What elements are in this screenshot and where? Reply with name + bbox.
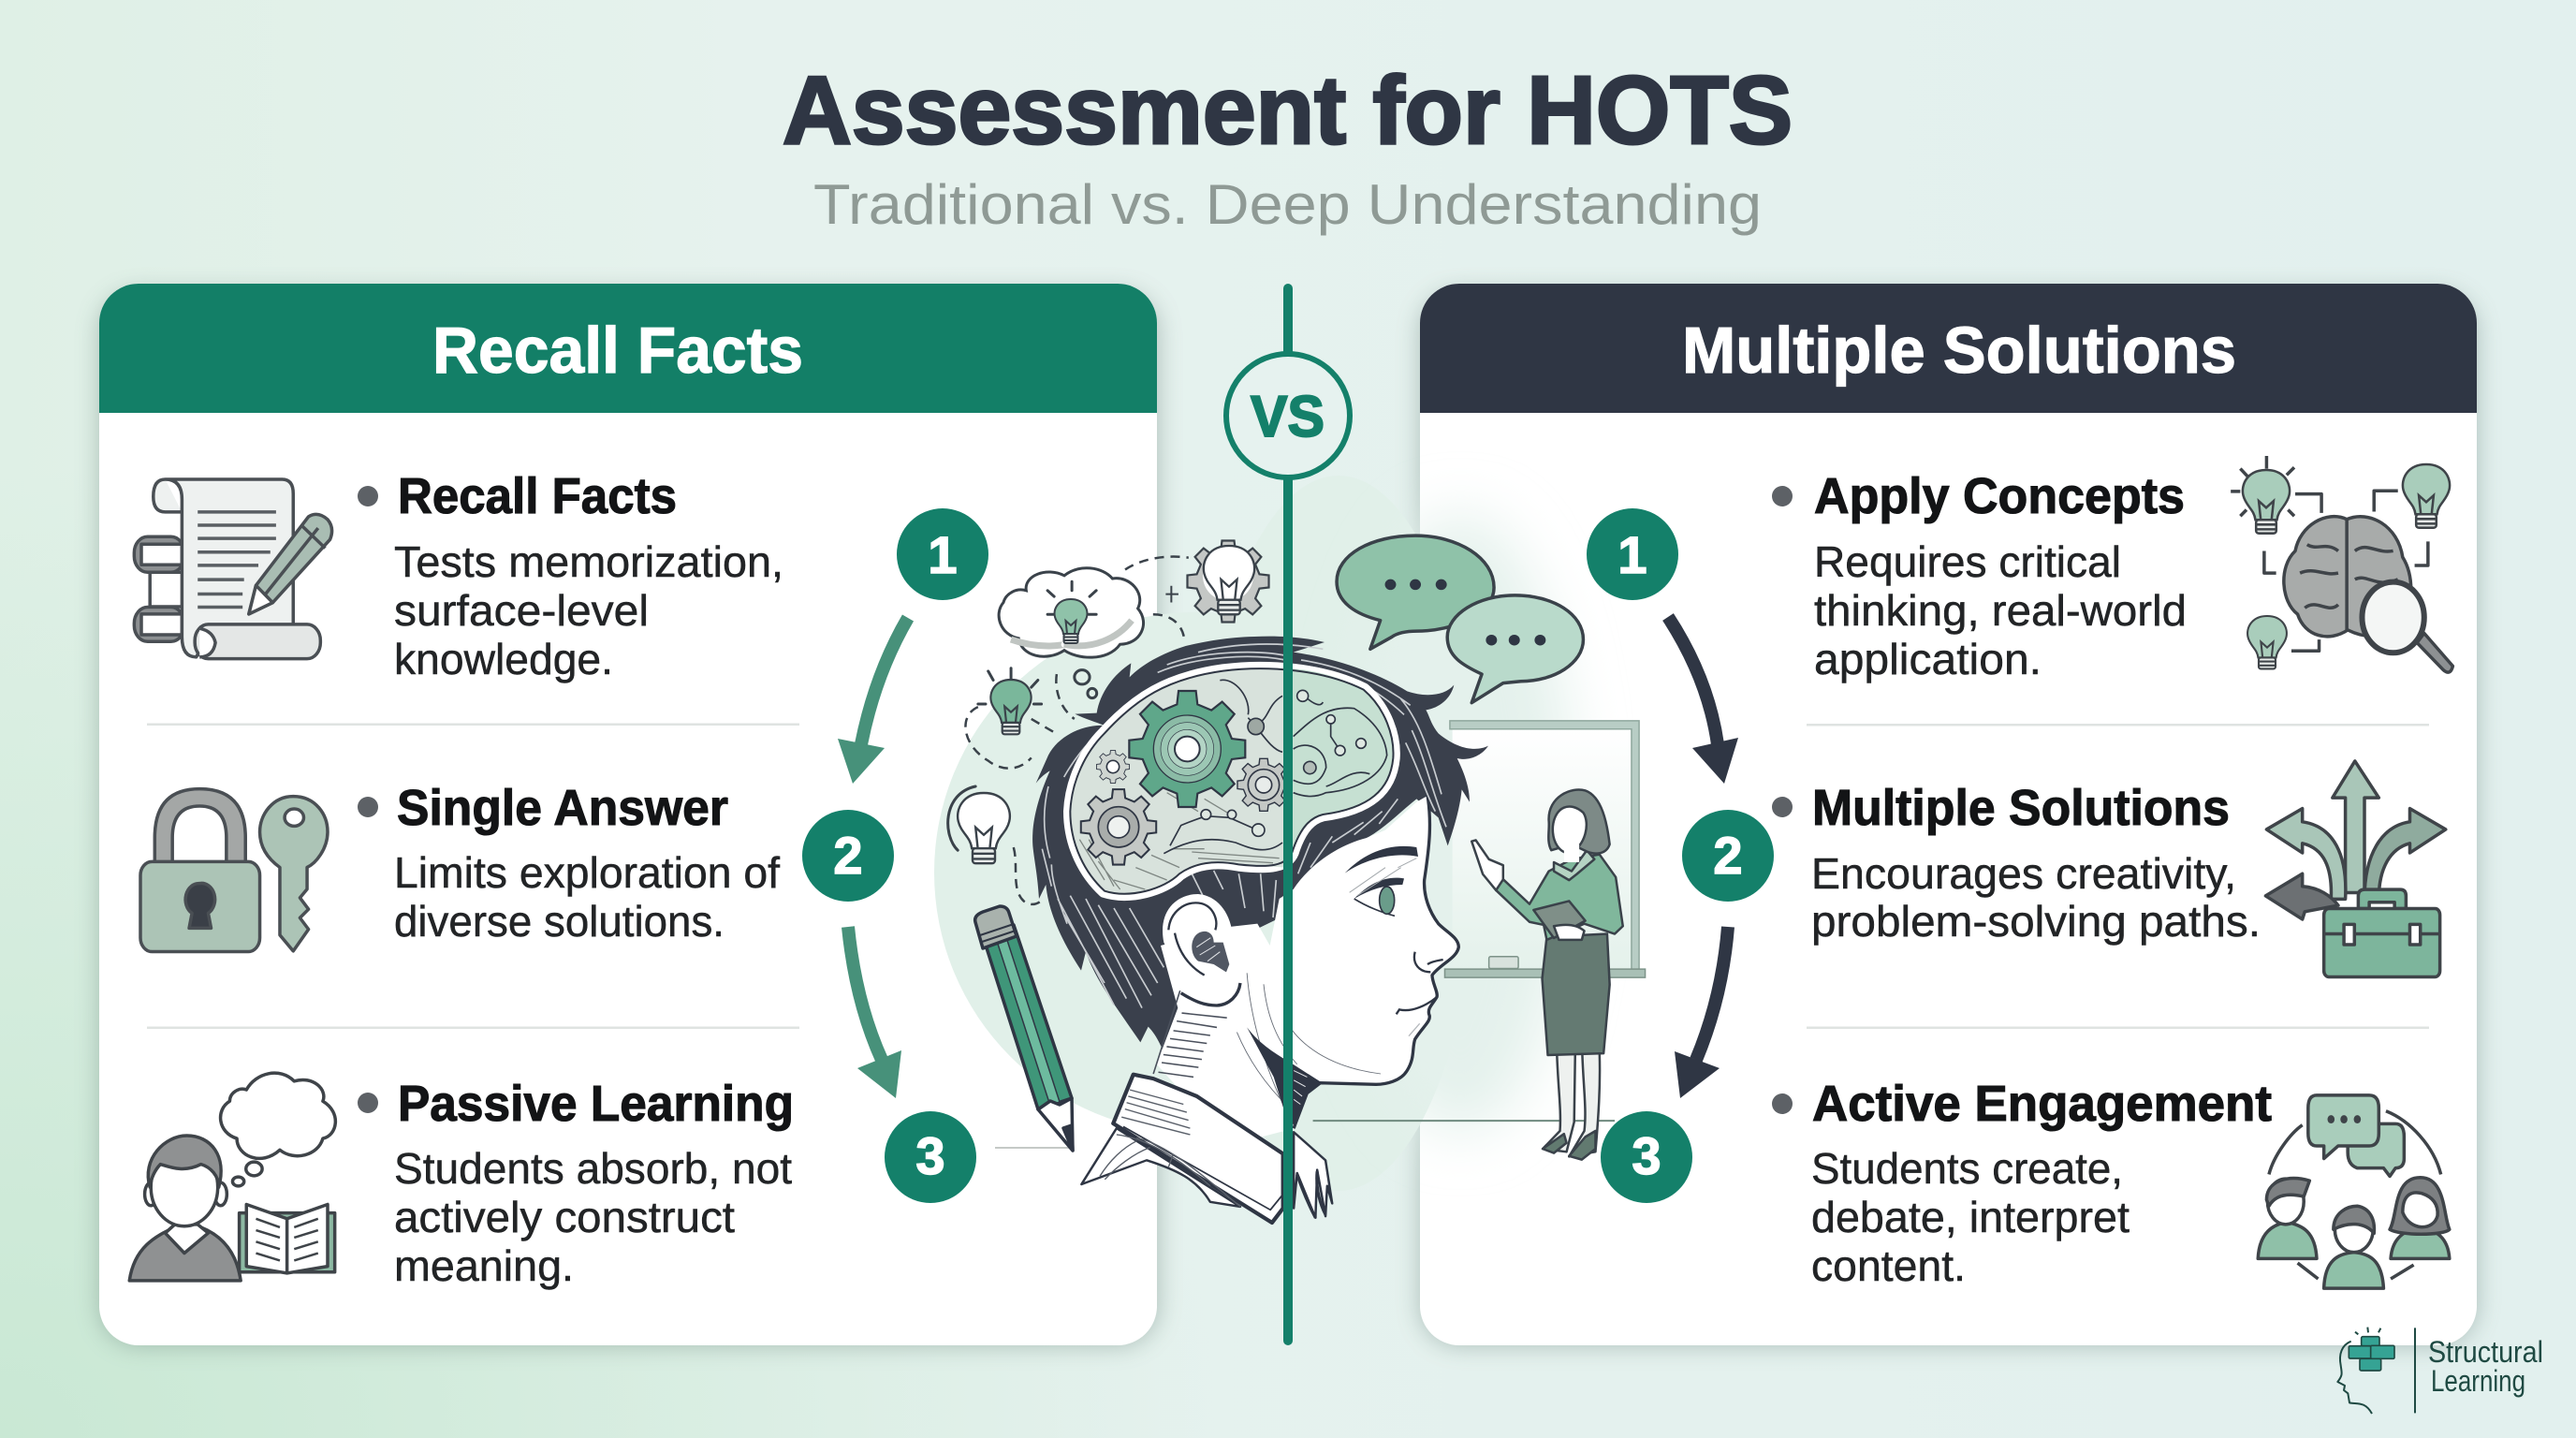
centre divider line [1283,284,1293,1345]
hair highlights [1042,644,1446,1008]
hair [1032,637,1488,1061]
eye and brow [1345,846,1418,873]
right item 3 text [1772,1076,2272,1290]
step badges right [1587,508,1774,1203]
VS badge: VS [1251,385,1325,449]
right item 3 text: Active Engagement [1812,1076,2272,1132]
left item 1 text [358,468,783,683]
arrow: right 1 to 2 [1668,617,1738,784]
illustration: boy profile [1032,637,1488,1223]
right item 1 text: Requires critical [1814,537,2121,586]
left item 1 text: Tests memorization, [394,537,783,586]
arrow: left 1 to 2 [838,618,908,784]
right panel heading: Multiple Solutions [1682,314,2236,387]
right item 2 text: Encourages creativity, [1811,849,2236,898]
left item 3 text [358,1076,794,1290]
left item 2 text: diverse solutions. [394,897,724,946]
brain [1070,668,1394,894]
icon: padlock and key [140,789,328,951]
subtitle: Traditional vs. Deep Understanding [813,173,1762,236]
icon: teacher [1471,789,1623,1160]
left item 2 text [358,780,780,946]
VS badge [1226,354,1350,477]
title: Assessment for HOTS [783,56,1793,164]
face and neck [1157,796,1458,1145]
panel: recall facts [99,284,1158,1345]
logo: Structural Learning: Structural [2428,1335,2543,1369]
right item 1 text: thinking, real-world [1814,586,2187,635]
ear [1163,894,1240,1002]
panel: multiple solutions [1420,284,2477,1345]
left panel heading: Recall Facts [432,314,803,387]
icon: scroll, books and pencil [134,479,332,659]
icon: whiteboard [1313,721,1646,1121]
left item 1 text: knowledge. [394,635,613,683]
step badges left: 3 [915,1126,945,1185]
icon: branching arrows and toolbox [2265,761,2446,976]
icon: pencil [975,906,1073,1151]
right item 3 text: content. [1811,1241,1966,1290]
left item 3 text: meaning. [394,1241,574,1290]
left item 1 text: Recall Facts [398,468,677,524]
left item 2 text: Limits exploration of [394,848,780,897]
left item 3 text: Passive Learning [398,1076,794,1132]
logo: Structural Learning: Learning [2431,1364,2525,1398]
left item 3 text: Students absorb, not [394,1144,792,1193]
step badges right: 3 [1632,1126,1661,1185]
right item 3 text: debate, interpret [1811,1193,2130,1241]
left item 1 text: surface-level [394,586,649,635]
right item 2 text [1772,780,2261,946]
icon: brain, bulbs and magnifier [2231,456,2452,672]
logo: Structural Learning [2337,1328,2543,1414]
icon: student reading [129,1073,335,1281]
left item 2 text: Single Answer [397,780,728,836]
step badges right: 1 [1617,525,1647,584]
arrow: right 2 to 3 [1675,927,1728,1098]
step badges right: 2 [1713,826,1743,885]
right item 2 text: problem-solving paths. [1811,897,2261,946]
icon: group discussion [2258,1095,2450,1288]
right item 1 text [1772,468,2187,683]
right item 1 text: application. [1814,635,2042,683]
step badges left [802,508,988,1203]
right item 2 text: Multiple Solutions [1812,780,2230,836]
icon: thought cloud and idea bulbs [948,540,1269,904]
dividers [147,723,2429,1029]
right item 1 text: Apply Concepts [1814,468,2185,524]
central illustration backdrop [934,476,1573,1191]
right item 3 text: Students create, [1811,1144,2123,1193]
arrow: left 2 to 3 [848,927,901,1098]
icon: speech bubbles [1337,536,1583,703]
step badges left: 2 [833,826,863,885]
step badges left: 1 [928,525,958,584]
left item 3 text: actively construct [394,1193,735,1241]
nose and mouth [1397,952,1443,1014]
neck, collar and shoulders [1081,973,1381,1223]
